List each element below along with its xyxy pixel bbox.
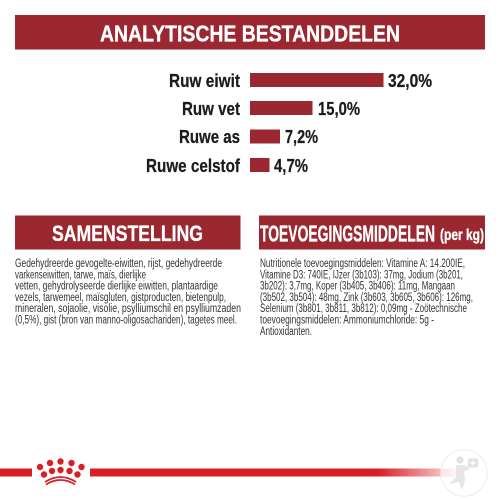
bar chart [146, 70, 432, 176]
text block: samenstelling: (0,5%), gist (bron van manno-oligosachariden), tagetes meel. [15, 314, 237, 326]
row: ruw eiwit: Ruw eiwit [169, 70, 240, 91]
text block: samenstelling [15, 258, 241, 326]
text block: toevoegingsmiddelen [260, 258, 473, 338]
text block: samenstelling: varkenseiwitten, tarwe, maïs, dierlijke [15, 269, 146, 281]
row: ruwe as: Ruwe as [179, 126, 240, 147]
row: ruw vet [182, 98, 360, 119]
icon: royal canin crown [37, 458, 85, 484]
text block: toevoegingsmiddelen: Antioxidanten. [260, 326, 312, 338]
heading: toevoegingsmiddelen (per kg): (per kg) [440, 227, 484, 244]
row: ruwe as [179, 126, 318, 147]
row: ruwe as: 7,2% [285, 126, 318, 147]
text block: samenstelling: mineralen, sojaolie, visolie, psylliumschil en psylliumzaden [15, 303, 241, 315]
heading: samenstelling: SAMENSTELLING [52, 221, 203, 246]
text block: toevoegingsmiddelen: toevoegingsmiddelen: Ammoniumchloride: 5g - [260, 314, 434, 326]
panel: analytische bestanddelen [15, 15, 485, 176]
text block: samenstelling: Gedehydreerde gevogelte-eiwitten, rijst, gedehydreerde [15, 258, 222, 270]
heading: samenstelling [15, 216, 240, 250]
row: ruwe celstof: Ruwe celstof [146, 155, 241, 176]
panel: toevoegingsmiddelen [259, 216, 485, 338]
row: ruw eiwit [169, 70, 432, 91]
row: ruw vet: 15,0% [318, 98, 360, 119]
row: ruw vet: Ruw vet [182, 98, 240, 119]
row: ruw eiwit: 32,0% [388, 70, 432, 91]
heading: analytische bestanddelen: ANALYTISCHE BESTANDDELEN [100, 20, 400, 46]
heading: analytische bestanddelen [15, 15, 485, 50]
panel: samenstelling [15, 216, 241, 326]
row: ruwe celstof: 4,7% [274, 155, 308, 176]
icon: care badge [441, 450, 487, 496]
text block: samenstelling: vezels, tarwemeel, maïsgluten, gistproducten, bietenpulp, [15, 292, 226, 304]
text block: samenstelling: vetten, gehydrolyseerde dierlijke eiwitten, plantaardige [15, 281, 218, 293]
footer band [0, 468, 460, 476]
